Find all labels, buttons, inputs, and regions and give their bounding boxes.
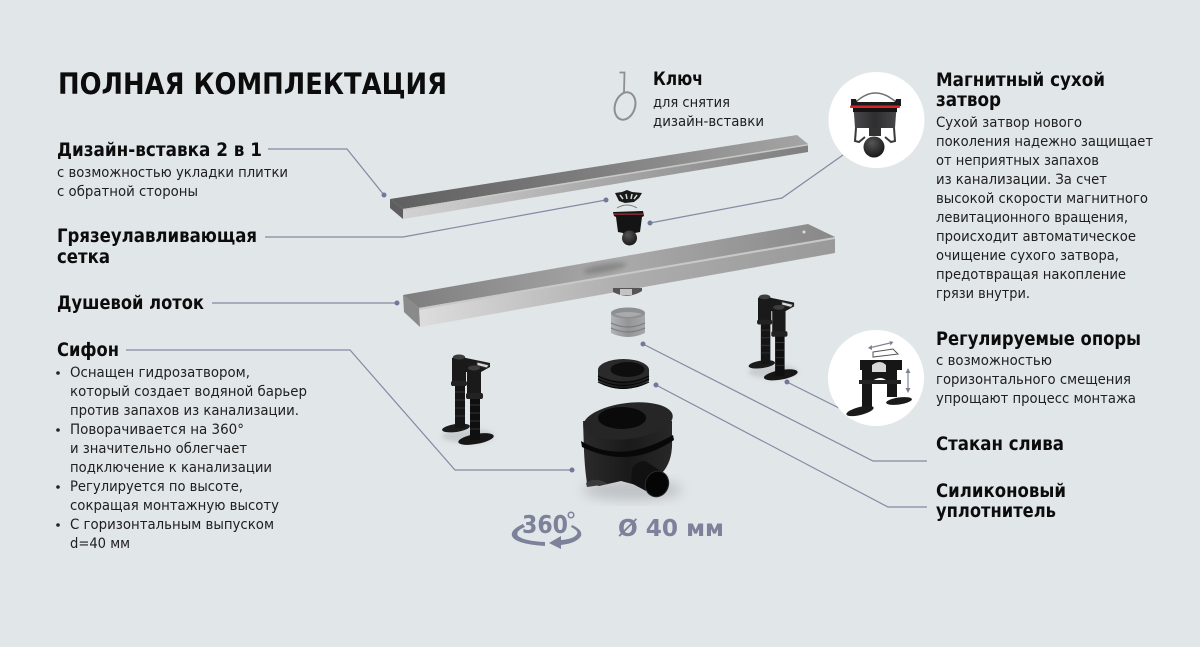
text block: magnetic dry trap: Сухой затвор нового	[936, 115, 1082, 131]
text block: magnetic dry trap: от неприятных запахов	[936, 153, 1099, 169]
left support	[442, 354, 495, 447]
design insert bar	[390, 135, 808, 219]
text block: siphon: против запахов из канализации.	[70, 403, 299, 419]
text block: siphon: d=40 мм	[70, 536, 130, 552]
leader line: dirt grate	[265, 198, 608, 237]
text block: adjustable supports: с возможностью	[936, 353, 1052, 369]
text block: design insert: Дизайн-вставка 2 в 1	[57, 140, 262, 161]
siphon body	[581, 398, 682, 500]
text block: siphon: Поворачивается на 360°	[70, 422, 244, 438]
text block: design insert: с возможностью укладки плитки	[57, 165, 288, 181]
text block: key	[653, 69, 764, 130]
text block: siphon: Оснащен гидрозатвором,	[70, 365, 250, 381]
leader line: design insert	[268, 149, 386, 198]
text block: adjustable supports: Регулируемые опоры	[936, 329, 1141, 350]
text block: magnetic dry trap: происходит автоматическое	[936, 229, 1136, 245]
right support	[748, 295, 798, 382]
text block: siphon: С горизонтальным выпуском	[70, 517, 274, 533]
silicone seal	[598, 359, 649, 389]
magnetic trap small	[613, 205, 644, 246]
text block: key: для снятия	[653, 95, 730, 111]
text block: siphon: и значительно облегчает	[70, 441, 247, 457]
drain cup	[611, 308, 645, 337]
text block: magnetic dry trap: предотвращая накопление	[936, 267, 1126, 283]
text block: siphon: подключение к канализации	[70, 460, 272, 476]
leader line: siphon	[126, 350, 574, 472]
circle: magnetic trap detail	[828, 72, 924, 168]
text block: magnetic dry trap: Магнитный сухой	[936, 70, 1105, 91]
text block: magnetic dry trap: из канализации. За счет	[936, 172, 1108, 188]
text block: silicone seal: Силиконовый	[936, 481, 1066, 502]
icon: key	[611, 72, 639, 122]
text block: design insert	[57, 140, 288, 200]
text block: dirt grate	[57, 226, 257, 268]
text block: key: дизайн-вставки	[653, 114, 764, 130]
text block: adjustable supports: упрощают процесс монтажа	[936, 391, 1136, 407]
text block: dirt grate: Грязеулавливающая	[57, 226, 257, 247]
dirt grate	[615, 190, 642, 203]
leader line: drain cup	[640, 342, 927, 461]
text block: dirt grate: сетка	[57, 247, 110, 268]
text block: drain cup: Стакан слива	[936, 434, 1064, 455]
leader line: magnetic trap	[648, 155, 843, 226]
text block: silicone seal: уплотнитель	[936, 501, 1056, 522]
rotation 360 icon	[512, 510, 581, 549]
text block: siphon: который создает водяной барьер	[70, 384, 307, 400]
leader line: silicone seal	[654, 382, 927, 507]
text block: magnetic dry trap: высокой скорости магнитного	[936, 191, 1148, 207]
text block: magnetic dry trap: очищение сухого затвора,	[936, 248, 1119, 264]
text block: design insert: с обратной стороны	[57, 184, 198, 200]
text block: magnetic dry trap: поколения надежно защищает	[936, 134, 1154, 150]
title: ПОЛНАЯ КОМПЛЕКТАЦИЯ	[58, 67, 447, 101]
text block: siphon	[56, 340, 307, 552]
shower tray	[403, 224, 835, 327]
diameter 40 mm label: Ø 40 мм	[618, 516, 724, 542]
text block: magnetic dry trap: грязи внутри.	[936, 286, 1030, 302]
text block: magnetic dry trap: левитационного вращения,	[936, 210, 1128, 226]
leader line: supports	[784, 380, 839, 408]
text block: siphon: Сифон	[57, 340, 119, 361]
text block: adjustable supports	[936, 329, 1141, 407]
circle: adjustable support detail	[828, 330, 924, 426]
text block: siphon: сокращая монтажную высоту	[70, 498, 279, 514]
text block: magnetic dry trap	[936, 70, 1154, 302]
text block: magnetic dry trap: затвор	[936, 90, 1001, 111]
rotation 360 icon: 360	[522, 510, 568, 539]
text block: siphon: Регулируется по высоте,	[70, 479, 243, 495]
leader line: shower tray	[212, 300, 400, 306]
text block: adjustable supports: горизонтального смещения	[936, 372, 1131, 388]
text block: shower tray: Душевой лоток	[57, 293, 204, 314]
text block: silicone seal	[936, 481, 1066, 522]
text block: key: Ключ	[653, 69, 703, 90]
